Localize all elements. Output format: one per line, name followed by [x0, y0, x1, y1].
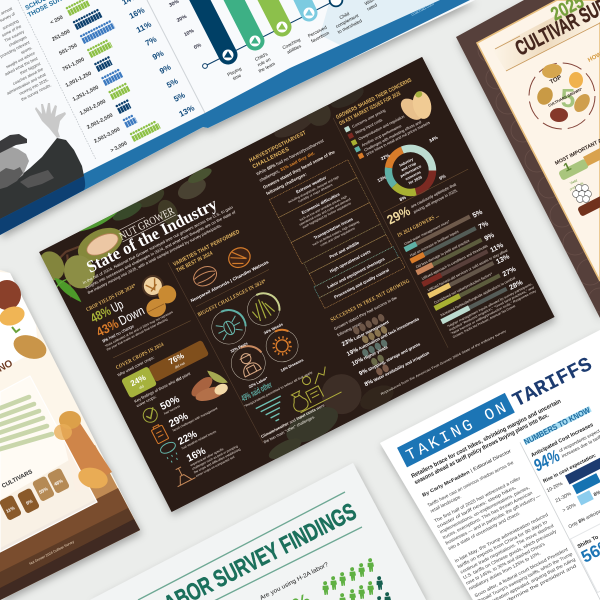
panel: cultivar survey poster: [456, 0, 600, 318]
in 2024 heading: IN 2024 GROWERS ...: [397, 213, 441, 239]
bars footnote: included "Reduced irrigation," "Good land practices," and: [448, 285, 535, 332]
challenge box text: [282, 168, 392, 300]
grower bars: Considered nut value/production factors*: [433, 272, 494, 305]
donut labels: 13%: [377, 175, 387, 183]
percent values: 5%: [172, 91, 187, 104]
article: continue trade negotiations. The move slashed: [459, 523, 555, 575]
harvest heading: [248, 130, 311, 170]
article text: moving into 2025.: [18, 77, 49, 96]
row labels: 751-1,000: [62, 57, 86, 73]
article text: their biggest: [19, 61, 42, 76]
title band: [492, 0, 600, 71]
harvest heading: CHALLENGES: [252, 147, 291, 170]
grower bars: 28%: [508, 279, 525, 292]
potatoes in basket: [54, 411, 110, 492]
column divider: [168, 261, 263, 444]
footer url: coachad.com: [410, 1, 435, 17]
intro: In the fall of 2024, National Nut Grower surveyed tree nut growers across the U.S. to gain: [82, 204, 234, 285]
icon: weed: [252, 299, 275, 322]
panel: taking on tariffs sheet: [380, 330, 600, 600]
concern legend: price hikes in retail and nut prices markets: [366, 121, 431, 156]
percent values: 9%: [151, 49, 165, 62]
row labels: 1,251-1,500: [72, 85, 100, 103]
axis labels: role on: [257, 56, 272, 67]
concern legend: Overproduction and regulation: [358, 115, 405, 141]
donut of top 5 cultivars: TOP: [549, 75, 563, 86]
successes rows: 10% Higher yields: [351, 344, 390, 368]
article: retaliatory duties from 125% to 10%.: [468, 550, 541, 591]
concern heading: ON KEY MARKET ISSUES FOR 2025: [339, 91, 402, 127]
article text: sought out advice: [5, 50, 36, 69]
deck: seasons ahead as tariff policy throws buying plans into flux.: [414, 413, 550, 486]
successes rows: 23% Labor management: [341, 319, 391, 348]
cost bars: [544, 444, 600, 516]
grower bars: [402, 202, 525, 326]
icon: potatoes: [0, 280, 50, 363]
survey table: [0, 0, 196, 184]
column divider 2: [331, 118, 450, 348]
variety names: Nonpareil Almonds | Chandler Walnuts: [190, 259, 270, 303]
logo: nut grower: [118, 208, 176, 242]
article: The first half of 2025 has witnessed a roller: [433, 475, 522, 524]
title rule top: [138, 492, 345, 600]
successes rows: 9% Shipping, storage and grants: [358, 341, 422, 377]
varieties heading: VARIETIES THAT PERFORMED: [172, 229, 241, 268]
bars footnote: [447, 282, 539, 339]
donut chart: Industry: [399, 157, 415, 168]
article: U.S. tariffs on Chinese goods, which previously: [462, 528, 558, 580]
row labels: 2,501-3,000: [93, 127, 121, 145]
row labels: < 250: [49, 15, 64, 26]
donut labels: [368, 130, 456, 207]
jar chart: [0, 468, 70, 521]
varieties heading: THE BEST IN 2024: [176, 250, 214, 274]
concern legend: [344, 92, 431, 160]
article: Soon after, a federal court blocked President: [474, 546, 569, 598]
bars footnote: Growers, Pacific Nut Producer, American Nut Grower: [452, 303, 517, 339]
article text: administration and what: [6, 71, 47, 96]
icon: walnut outline: [228, 247, 251, 268]
bar chart: [168, 0, 378, 83]
findings list: had weather-related issues: [181, 429, 217, 450]
donut chart: concerns: [405, 170, 422, 181]
row labels: [36, 15, 128, 159]
percent values: 7%: [144, 35, 158, 48]
row labels: 1,001-1,250: [65, 71, 93, 89]
basket: [60, 420, 112, 492]
challenge boxes: [269, 159, 405, 308]
article: into a state of uncertainty and chaos.: [447, 510, 521, 551]
title tariffs: TARIFFS: [509, 354, 596, 413]
photo: coach waving: [0, 103, 85, 235]
dim leaves top: [112, 88, 364, 224]
percent values: 11%: [135, 20, 153, 35]
grower bars: Utilized harvest-aid services or sold assets to stay afloat: [427, 248, 508, 292]
article: implementations, un-implementations, pauses,: [439, 485, 530, 535]
cost heading: Anticipated Cost Increases: [530, 422, 595, 459]
harvest text: [255, 136, 339, 196]
shifts card: Shifts To: [577, 534, 600, 550]
other footnote: *Respondents permitted to select all that apply: [244, 370, 314, 408]
optimism stat: 29%: [384, 203, 413, 227]
article: retail landscape.: [429, 494, 462, 514]
key findings: Key findings of those who did plant: [133, 371, 192, 404]
grower bars: 27%: [502, 265, 518, 278]
stat 94: [530, 424, 600, 475]
chart watermark: [320, 0, 440, 50]
bar chart: 0%: [193, 42, 203, 51]
article: In late May, the Trump administration reduced: [454, 512, 549, 564]
jar chart: 55%: [38, 486, 49, 495]
bar chart: 10%: [183, 28, 195, 38]
findings list: experienced other specific: [190, 447, 225, 467]
byline: By Carly McFadden | Editorial Director: [421, 448, 513, 499]
chart nodes: [221, 0, 342, 62]
successes intro: following areas:: [336, 320, 363, 337]
source note: Nut Grower 2024 Cultivar Survey: [29, 540, 75, 566]
challenge labels: 32% Pests: [230, 341, 248, 354]
findings list: had success: [163, 404, 181, 416]
article: rose to 145%, to 30% and slashed China's: [465, 541, 546, 586]
optimism stat: pricing will improve in 2025.: [413, 187, 459, 214]
article: tariffs on imports from China for 90 days to: [457, 519, 548, 569]
icon: pistachios: [394, 85, 440, 130]
findings list: 29%: [167, 411, 190, 430]
concern heading: GROWERS SHARED THEIR CONCERNS: [335, 77, 413, 121]
findings list: [160, 396, 241, 477]
article text: the survey results.: [20, 82, 52, 102]
percent values: 16%: [128, 6, 146, 21]
article: Tariffs have cast an ominous shadow across the: [427, 460, 515, 508]
article: [426, 455, 579, 600]
icon: shovel: [176, 466, 196, 488]
challenge box text: operational costs and costs and demand: [299, 197, 352, 227]
grower bars: 13%: [495, 253, 512, 266]
successes nut rows: [350, 313, 407, 378]
other stat: 49% said other: [240, 379, 274, 403]
challenge labels: 14% Diseases: [280, 358, 304, 373]
priority pills: [558, 148, 600, 217]
challenge box text: Labor and equipment shortages: [326, 256, 386, 290]
cover crops bar: did not: [174, 361, 186, 370]
harvest heading: HARVEST/POSTHARVEST: [248, 130, 308, 164]
grower bars: Had an increase in fertilizer inputs: [409, 229, 460, 258]
icon: money bag and costs: [290, 366, 342, 414]
percent values: 9%: [158, 63, 172, 76]
priority pills: Yield: [569, 179, 578, 186]
article: truces, exemptions. This has thrown American: [442, 490, 534, 540]
challenge box text: Extreme weather: [295, 175, 327, 194]
axis labels: [226, 0, 378, 83]
title box: [397, 393, 515, 467]
successes heading: SUCCESSES IN TREE NUT GROWING: [330, 278, 411, 324]
yield stats: 43%: [94, 316, 121, 340]
title taking on: TAKING ON: [403, 399, 509, 465]
panel: labor survey sheet: [90, 463, 426, 600]
challenge box text: High operational costs: [329, 248, 372, 274]
people pictogram: [322, 558, 391, 600]
row labels: 251-500: [51, 29, 71, 43]
axis labels: Playing: [226, 66, 242, 77]
article text: surveying: [2, 18, 20, 31]
other caption: Climate/weather and input costs were: [260, 402, 326, 439]
stat 94: of respondents expect: [558, 428, 600, 453]
concern legend: Concerns over pricing: [352, 109, 386, 129]
challenge box text: including drought/rain, delayed and high: [287, 175, 340, 204]
percent values: 13%: [178, 103, 196, 119]
challenge box text: Processing and quality control: [333, 267, 390, 300]
harvest text: While 69% had no harvest/postharvest: [255, 138, 325, 177]
findings list: challenges such as pest or pumping: [191, 444, 239, 471]
priority pills: productivity: [569, 181, 585, 191]
challenge box text: costs and other regulations: [320, 226, 356, 247]
challenge labels: 22% Labor*: [248, 376, 269, 389]
grower bars: 7%: [478, 220, 490, 231]
top white panel: [0, 272, 38, 370]
rounded panel: [0, 376, 97, 552]
grower bars: 11%: [489, 242, 505, 254]
crop yields heading: CROP YIELDS FOR 2024*: [85, 283, 137, 313]
brown ground: [0, 445, 140, 600]
donut labels: 8%: [399, 195, 407, 202]
axis labels: Perceived: [307, 25, 328, 39]
percent values: [121, 0, 196, 119]
intro: the industry moving into 2025, with a total sample provided by survey participants.: [87, 222, 223, 295]
harvest text: Growers stated they faced some of the: [262, 149, 336, 190]
findings list: cover crops on compacted soil: [195, 455, 235, 478]
cost bars: > 30%: [562, 502, 578, 514]
grower bars: Did less damage to yield and practice: [415, 239, 470, 269]
successes intro: Growers stated they had success in the: [333, 295, 398, 331]
concern legend: Rising input costs: [355, 118, 383, 135]
row labels: 1,501-2,000: [79, 99, 107, 117]
icon: tornado: [256, 395, 281, 422]
article text: coaches about the: [12, 66, 45, 86]
donut chart: and crop: [401, 161, 417, 172]
icon: walnuts: [142, 275, 176, 318]
article text: [0, 5, 53, 106]
harvest text: following challenges:: [265, 171, 308, 196]
icon: rain cloud: [160, 442, 178, 463]
donut labels: 9%: [438, 174, 446, 181]
percent values: 5%: [165, 77, 180, 90]
challenge box text: humidity or major disasters: [298, 182, 334, 204]
donut labels: 34%: [428, 135, 439, 143]
row labels: 2,001-2,500: [86, 113, 114, 131]
article text: challenges: [8, 34, 28, 48]
intro: insights into successes and challenges in 2024, and what their thoughts are on the state of: [84, 209, 237, 290]
successes rows: [341, 306, 437, 389]
priority pills: 1: [561, 159, 574, 175]
donut chart: performance: [400, 164, 422, 178]
panel: school survey sheet: [0, 0, 475, 235]
article: coaster of tariff news: steep hikes,: [436, 485, 517, 529]
brown border pattern: [478, 38, 600, 312]
donut of top 5 cultivars: CULTIVARS GROWN*: [548, 87, 583, 108]
challenge box text: Transportation issues: [313, 216, 354, 240]
concern legend: Another crop performance: [361, 124, 402, 148]
icon: clipboard: [150, 423, 169, 444]
dim leaves bottom: [269, 374, 394, 459]
yield stats: Up: [108, 297, 126, 315]
optimism stat: are cautiously optimistic that: [410, 181, 458, 209]
varieties heading: [172, 230, 240, 272]
cost bars: 10-20%: [546, 481, 564, 494]
shifts card: [570, 494, 600, 593]
findings list: the crops and difficulties establishing: [193, 447, 241, 474]
people pictograms: [66, 0, 164, 139]
findings list: 22%: [176, 429, 199, 448]
optimism stat: [384, 179, 461, 227]
deck: Retailers brace for cost hikes, shrinking margins and uncertain: [411, 399, 562, 480]
panel: potato poster: [0, 270, 140, 600]
grower bars: 9%: [483, 232, 496, 243]
jar chart: 46%: [53, 478, 64, 487]
challenge labels: [229, 321, 304, 389]
grower bars: 5%: [472, 208, 485, 220]
donut labels: 22%: [380, 153, 390, 161]
article text: sports.: [20, 45, 33, 55]
other caption: the two main "other" challenges.: [263, 414, 316, 444]
challenge circles: [212, 292, 298, 380]
panel: state of the industry poster: [29, 50, 556, 517]
cover crops bar: 76%: [167, 351, 186, 366]
green bars: [0, 397, 52, 452]
bar chart: 20%: [176, 14, 188, 24]
jar chart: 11%: [5, 505, 15, 514]
no change note: *Data calibrated at the end of 2024 may not represent: [104, 310, 174, 348]
concern legend: Challenges with marketing efforts and: [364, 120, 422, 152]
key findings: cover crops:: [135, 394, 157, 408]
stat 94: 94%: [530, 446, 563, 475]
icon: almond outline: [193, 266, 218, 286]
cover crops bar: [121, 339, 211, 398]
cover crops heading: COVER CROPS IN 2024: [115, 342, 165, 371]
axis labels: complement: [335, 13, 360, 29]
no change note: the year that made an almost final total affecting: [106, 317, 168, 352]
bars footnote: "New harvest or milling/production tools." Response may: [450, 289, 537, 336]
grower bars: Increased herbicide/fungicide applications to combat: [440, 276, 516, 317]
title rule bottom: [210, 527, 362, 600]
icon: nut pile: [573, 185, 591, 202]
title rules: [495, 23, 600, 71]
fold line right: [147, 0, 205, 113]
fold line left: [15, 0, 99, 160]
title: State of the Industry: [83, 194, 221, 277]
axis labels: the team: [258, 61, 276, 74]
no change note: 9% had no change: [101, 323, 135, 344]
icon: check: [142, 407, 158, 423]
successes rows: 19% Automation and tech investments: [346, 316, 421, 358]
illustration: pistachio branch: [41, 212, 122, 302]
cover crops bar: 24%: [129, 373, 147, 388]
yield stats: Down: [116, 303, 147, 328]
rise label: Rise in cost expectation:: [542, 452, 598, 485]
icon: beetle: [215, 315, 244, 341]
axis labels: rated: [366, 2, 378, 12]
grower bars: Used water management more*: [403, 219, 451, 246]
bars footnote: *Higher management inputs allowed by survey participants,: [447, 282, 533, 328]
cover crop sub: Who used cover crops:: [116, 354, 155, 378]
row labels: > 3,000: [110, 141, 128, 154]
findings list: faced challenges with management: [172, 406, 218, 433]
donut chart: for 2025: [408, 175, 423, 185]
yield stats: 48%: [88, 303, 114, 326]
axis labels: abilities: [286, 43, 303, 55]
icon: virus: [272, 336, 292, 356]
biggest challenges heading: BIGGEST CHALLENGES IN 2024*: [197, 278, 267, 318]
axis labels: Coaching: [282, 37, 301, 50]
article text: The country: [3, 28, 26, 43]
harvest text: challenges, 31% said they did.: [258, 150, 316, 183]
logo: nut grower: NUT GROWER: [118, 205, 177, 243]
article text: providing relevant: [0, 39, 31, 59]
icon: worker: [240, 353, 262, 378]
chart heading: CULTIVARS: [1, 469, 34, 490]
axis labels: to marshaled: [337, 18, 363, 35]
successes rows: 8% Water availability and irrigation: [364, 350, 431, 388]
challenge box text: such as low and unstable prices, high: [299, 194, 348, 222]
blue band: [0, 0, 470, 235]
yield stats: [92, 302, 145, 336]
findings list: 50%: [159, 394, 182, 413]
challenge box text: such as limited trailers, high shipping: [312, 219, 360, 247]
challenge box text: each highlighted by further regulations: [302, 201, 352, 229]
axis labels: time: [232, 73, 242, 81]
axis labels: Child's: [254, 51, 269, 62]
column rule: [520, 442, 600, 600]
donut of top 5 cultivars: [529, 62, 595, 129]
cost bars: 21-30%: [554, 491, 573, 504]
challenge box text: Economic difficulties: [301, 191, 341, 215]
axis labels: Child: [339, 11, 350, 20]
article text: asked what the best: [4, 55, 39, 77]
cover crops bar: did: [139, 384, 145, 390]
row labels: 501-750: [58, 43, 78, 57]
findings list: 16%: [185, 446, 208, 465]
donut of top 5 cultivars: 5: [561, 83, 575, 113]
jar chart: 9%: [25, 498, 33, 506]
axis labels: favoritism: [310, 30, 330, 44]
article text: some of the: [1, 23, 23, 38]
donut chart: [379, 139, 442, 202]
icon: almonds: [192, 370, 228, 401]
challenge labels: 34% Weeds: [263, 322, 284, 335]
challenge box text: Pest and wildlife: [328, 240, 361, 259]
source line: Reproduced from the American Fruit Grower 2024 State of the Industry survey: [380, 329, 507, 396]
cream page: [477, 0, 600, 281]
grower bars: Utilized approach to conditions and thresholds: [421, 244, 489, 281]
article: businesses — and in particular, the gift industry —: [445, 493, 542, 546]
